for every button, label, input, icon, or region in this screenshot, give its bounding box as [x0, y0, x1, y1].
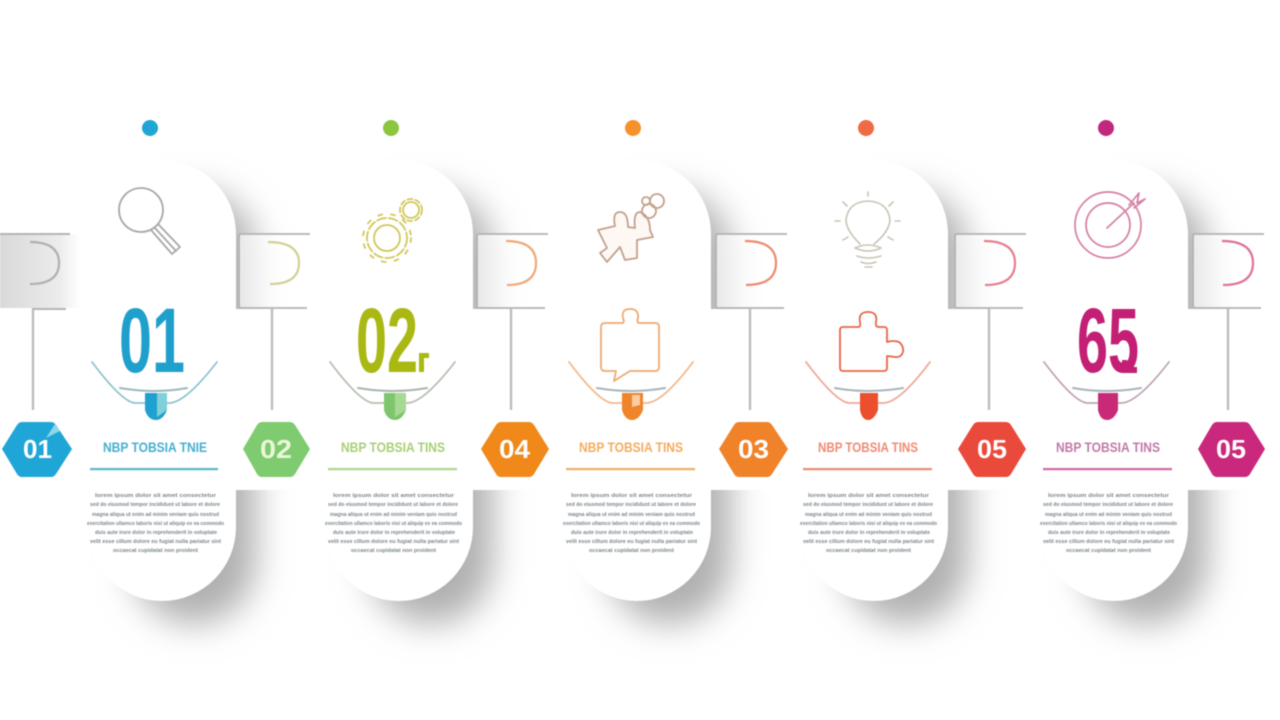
hexagon badge 03	[719, 422, 788, 477]
body text	[1040, 493, 1178, 554]
panel: step 5	[1040, 120, 1188, 601]
body text: occaecat cupidatat non proident	[826, 548, 911, 554]
body text: lorem ipsum dolor sit amet consectetur	[808, 493, 930, 499]
body text: velit esse cillum dolore eu fugiat nulla pariatur sint	[1043, 539, 1174, 545]
connector box: magenta	[1193, 234, 1264, 410]
body text	[325, 493, 463, 554]
hexagon badge 05 magenta: 05	[1216, 434, 1246, 464]
body text: velit esse cillum dolore eu fugiat nulla pariatur sint	[90, 539, 221, 545]
connector box: far left	[0, 234, 80, 410]
body text: lorem ipsum dolor sit amet consectetur	[571, 493, 693, 499]
body text: magna aliqua ut enim ad minim veniam quis nostrud	[1045, 512, 1173, 518]
big number	[1077, 290, 1139, 392]
body text: sed do eiusmod tempor incididunt ut labore et dolore	[90, 502, 220, 508]
body text: magna aliqua ut enim ad minim veniam quis nostrud	[805, 512, 933, 518]
heading: NBP TOBSIA TINS	[1056, 440, 1160, 455]
body text: duis aute irure dolor in reprehenderit in voluptate	[95, 530, 217, 536]
connector box: green	[239, 234, 310, 410]
body text: magna aliqua ut enim ad minim veniam quis nostrud	[92, 512, 220, 518]
hexagon badge 01: 01	[23, 434, 52, 464]
cradle	[1044, 362, 1169, 420]
dot	[1098, 120, 1114, 136]
hexagon badge 02: 02	[260, 434, 292, 464]
rule	[1043, 468, 1172, 470]
body text: duis aute irure dolor in reprehenderit in voluptate	[808, 530, 930, 536]
hexagon badge 05 red	[958, 422, 1026, 477]
connector box: pink	[955, 234, 1026, 410]
rule	[90, 468, 218, 470]
body text: lorem ipsum dolor sit amet consectetur	[1048, 493, 1170, 499]
cradle	[92, 362, 217, 420]
hexagon badge 05 magenta	[1198, 422, 1265, 477]
connector box: red-orange	[716, 234, 787, 410]
dot	[383, 120, 399, 136]
body text: velit esse cillum dolore eu fugiat nulla pariatur sint	[803, 539, 934, 545]
panel: step 2	[325, 120, 473, 601]
body text	[800, 493, 938, 554]
big number: 01	[119, 290, 185, 392]
heading: NBP TOBSIA TINS	[818, 440, 918, 455]
body text: magna aliqua ut enim ad minim veniam quis nostrud	[330, 512, 458, 518]
dot	[858, 120, 874, 136]
heading: NBP TOBSIA TINS	[579, 440, 683, 455]
hexagon badge 02	[243, 422, 310, 477]
icon: gears	[363, 199, 422, 262]
big number: 65	[1077, 290, 1139, 392]
body text: occaecat cupidatat non proident	[113, 548, 198, 554]
panel: step 1	[87, 120, 236, 601]
icon: target with arrow	[1075, 192, 1145, 258]
icon: puzzle piece	[840, 312, 903, 371]
body text: velit esse cillum dolore eu fugiat nulla pariatur sint	[566, 539, 697, 545]
body text: exercitation ullamco laboris nisi ut aliquip ex ea commodo	[325, 521, 463, 527]
body text: sed do eiusmod tempor incididunt ut labore et dolore	[566, 502, 696, 508]
body text: sed do eiusmod tempor incididunt ut labore et dolore	[803, 502, 933, 508]
body text: sed do eiusmod tempor incididunt ut labore et dolore	[1043, 502, 1173, 508]
body text: velit esse cillum dolore eu fugiat nulla pariatur sint	[328, 539, 459, 545]
rule	[566, 468, 695, 470]
body text: lorem ipsum dolor sit amet consectetur	[95, 493, 217, 499]
heading: NBP TOBSIA TNIE	[103, 440, 207, 455]
cradle	[806, 362, 930, 420]
hexagon badge 03: 03	[738, 434, 769, 464]
connector box: orange	[477, 234, 548, 410]
body text	[563, 493, 701, 554]
icon: puzzle speech bubble	[601, 309, 659, 381]
hexagon badge 04	[481, 422, 549, 477]
body text: sed do eiusmod tempor incididunt ut labore et dolore	[328, 502, 458, 508]
rule	[803, 468, 932, 470]
cradle	[330, 362, 455, 420]
dot	[625, 120, 641, 136]
body text: exercitation ullamco laboris nisi ut aliquip ex ea commodo	[1040, 521, 1178, 527]
card shadows	[132, 190, 1208, 624]
body text: occaecat cupidatat non proident	[351, 548, 436, 554]
body text: exercitation ullamco laboris nisi ut aliquip ex ea commodo	[87, 521, 225, 527]
body text: lorem ipsum dolor sit amet consectetur	[333, 493, 455, 499]
panel: step 4	[800, 120, 948, 601]
icon: puzzle and cloud	[598, 194, 664, 262]
body text: duis aute irure dolor in reprehenderit in voluptate	[571, 530, 693, 536]
big number: 02	[356, 290, 418, 392]
heading: NBP TOBSIA TINS	[341, 440, 445, 455]
hexagon badge 04: 04	[499, 434, 531, 464]
body text: occaecat cupidatat non proident	[589, 548, 674, 554]
hexagon badge 01	[2, 422, 72, 477]
icon: light bulb	[835, 192, 900, 267]
body text: exercitation ullamco laboris nisi ut aliquip ex ea commodo	[800, 521, 938, 527]
dot	[142, 120, 158, 136]
body text: occaecat cupidatat non proident	[1066, 548, 1151, 554]
body text	[87, 493, 225, 554]
body text: exercitation ullamco laboris nisi ut aliquip ex ea commodo	[563, 521, 701, 527]
cradle	[569, 362, 693, 420]
icon: magnifier	[119, 188, 180, 254]
body text: duis aute irure dolor in reprehenderit in voluptate	[333, 530, 455, 536]
body text: duis aute irure dolor in reprehenderit in voluptate	[1048, 530, 1170, 536]
body text: magna aliqua ut enim ad minim veniam quis nostrud	[568, 512, 696, 518]
panel: step 3	[563, 120, 711, 601]
hexagon badge 05 red: 05	[977, 434, 1007, 464]
rule	[328, 468, 457, 470]
